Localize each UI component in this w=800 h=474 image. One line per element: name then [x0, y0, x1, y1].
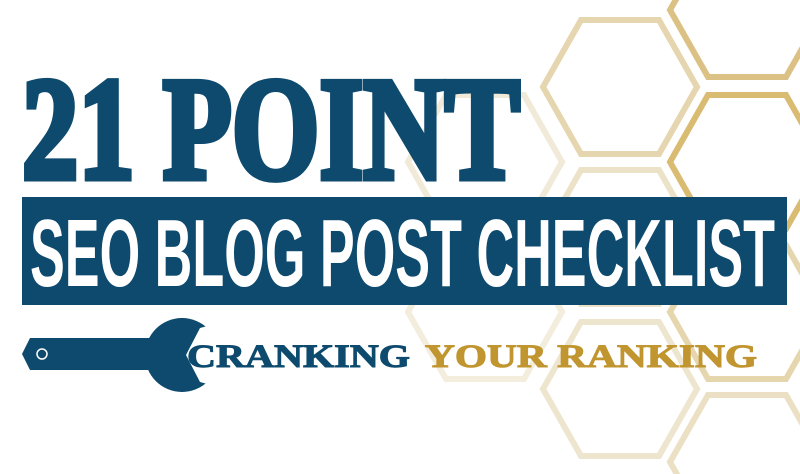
icon: wrench [22, 318, 222, 392]
tagline [187, 339, 757, 375]
banner [22, 197, 787, 307]
background honeycomb [408, 0, 800, 474]
title: 21 POINT: 21 POINT [22, 48, 520, 210]
tagline: YOUR RANKING [425, 339, 757, 375]
tagline: CRANKING [187, 339, 410, 375]
